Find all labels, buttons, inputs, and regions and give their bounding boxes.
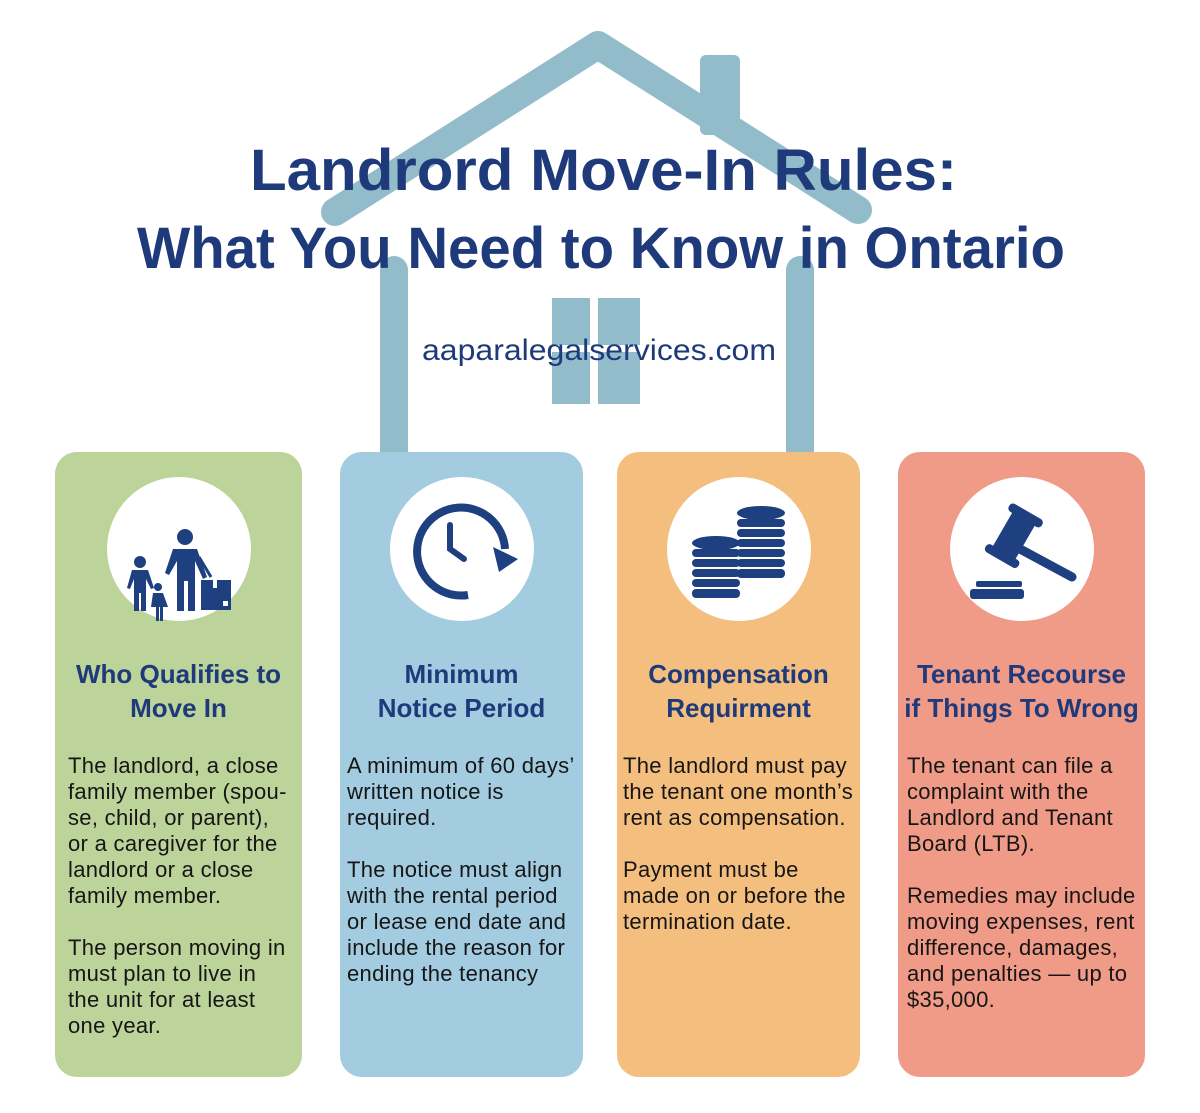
- text: who qualifies body: landlord or a close: [68, 857, 253, 882]
- text: who qualifies body: the unit for at least: [68, 987, 255, 1012]
- heading: who qualifies: Move In: [130, 693, 227, 723]
- text: compensation body: the tenant one month’s: [623, 779, 853, 804]
- heading: notice period: Notice Period: [378, 693, 545, 723]
- text: who qualifies body: or a caregiver for the: [68, 831, 278, 856]
- title: Landrord Move-In Rules:: [250, 138, 957, 203]
- text: who qualifies body: must plan to live in: [68, 961, 256, 986]
- text: notice body: [347, 753, 575, 986]
- text: recourse body: [907, 753, 1136, 1012]
- panel: who qualifies: [55, 452, 302, 1077]
- heading: who qualifies: [76, 659, 281, 723]
- heading: tenant recourse: if Things To Wrong: [904, 693, 1139, 723]
- heading: compensation: [648, 659, 829, 723]
- text: recourse body: Board (LTB).: [907, 831, 1035, 856]
- text: notice body: include the reason for: [347, 935, 565, 960]
- website url: aaparalegalservices.com: [422, 334, 776, 367]
- title: [137, 138, 1065, 281]
- icon: clock: [390, 477, 534, 621]
- text: who qualifies body: se, child, or parent),: [68, 805, 269, 830]
- heading: compensation: Requirment: [666, 693, 811, 723]
- heading: tenant recourse: [904, 659, 1139, 723]
- text: compensation body: termination date.: [623, 909, 792, 934]
- text: recourse body: complaint with the: [907, 779, 1088, 804]
- text: compensation body: rent as compensation.: [623, 805, 846, 830]
- text: recourse body: $35,000.: [907, 987, 995, 1012]
- text: compensation body: [623, 753, 853, 934]
- icon: family moving: [106, 477, 250, 621]
- heading: notice period: [378, 659, 545, 723]
- text: who qualifies body: family member (spou-: [68, 779, 287, 804]
- text: who qualifies body: [68, 753, 287, 1038]
- text: notice body: ending the tenancy: [347, 961, 538, 986]
- text: who qualifies body: family member.: [68, 883, 221, 908]
- panel: tenant recourse: [898, 452, 1145, 1077]
- text: compensation body: Payment must be: [623, 857, 799, 882]
- text: notice body: or lease end date and: [347, 909, 566, 934]
- icon: coins: [666, 477, 810, 621]
- text: notice body: required.: [347, 805, 437, 830]
- icon: gavel: [950, 477, 1094, 621]
- text: notice body: A minimum of 60 days’: [347, 753, 575, 778]
- text: compensation body: The landlord must pay: [623, 753, 847, 778]
- text: recourse body: moving expenses, rent: [907, 909, 1135, 934]
- heading: compensation: Compensation: [648, 659, 829, 689]
- text: notice body: The notice must align: [347, 857, 562, 882]
- text: recourse body: Landlord and Tenant: [907, 805, 1113, 830]
- panel: compensation: [617, 452, 860, 1077]
- panel: notice period: [340, 452, 583, 1077]
- heading: who qualifies: Who Qualifies to: [76, 659, 281, 689]
- heading: tenant recourse: Tenant Recourse: [917, 659, 1126, 689]
- heading: notice period: Minimum: [404, 659, 519, 689]
- text: notice body: with the rental period: [347, 883, 558, 908]
- text: recourse body: difference, damages,: [907, 935, 1118, 960]
- title: What You Need to Know in Ontario: [137, 216, 1065, 281]
- text: recourse body: Remedies may include: [907, 883, 1136, 908]
- text: who qualifies body: one year.: [68, 1013, 161, 1038]
- text: compensation body: made on or before the: [623, 883, 846, 908]
- house outline background: [321, 31, 872, 452]
- text: who qualifies body: The landlord, a close: [68, 753, 279, 778]
- text: notice body: written notice is: [347, 779, 504, 804]
- text: recourse body: The tenant can file a: [907, 753, 1113, 778]
- text: recourse body: and penalties — up to: [907, 961, 1127, 986]
- text: who qualifies body: The person moving in: [68, 935, 286, 960]
